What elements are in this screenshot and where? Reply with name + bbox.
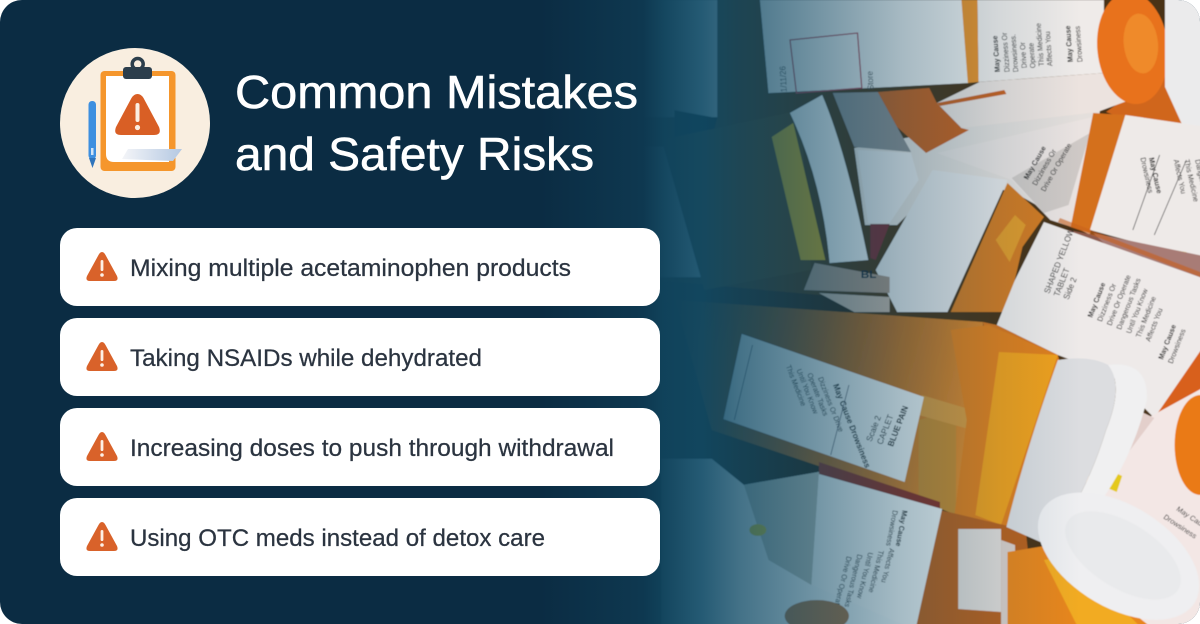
icon: clipboard with warning [60, 48, 210, 198]
photo: pile of prescription pill bottles: May Cause [1147, 157, 1164, 194]
row 3: increasing doses: Increasing doses to push through withdrawal [130, 435, 614, 462]
photo: pile of prescription pill bottles: May Cause [894, 510, 910, 547]
photo: pile of prescription pill bottles: Drowsiness [1138, 157, 1156, 194]
photo: pile of prescription pill bottles: Dizziness Or Drive [816, 376, 846, 433]
row 3: increasing doses [60, 408, 660, 486]
title: Common Mistakes [235, 66, 638, 118]
photo: pile of prescription pill bottles: May Cause [1085, 281, 1107, 319]
photo: pile of prescription pill bottles [619, 0, 1200, 624]
photo: pile of prescription pill bottles: Drowsiness [1073, 25, 1085, 62]
photo: pile of prescription pill bottles: Scale 2 [864, 414, 883, 443]
photo: pile of prescription pill bottles: This Medicine [867, 550, 886, 594]
photo: pile of prescription pill bottles: May Cause [1021, 145, 1048, 181]
photo: pile of prescription pill bottles: Drowsiness. [1008, 34, 1020, 72]
row 1: mixing products: Mixing multiple acetaminophen products [130, 255, 571, 282]
row 2: NSAIDs [60, 318, 660, 396]
photo: pile of prescription pill bottles: BL [861, 269, 876, 281]
photo: pile of prescription pill bottles: Dizziness Or [1030, 147, 1058, 187]
title: and Safety Risks [235, 128, 594, 180]
photo: pile of prescription pill bottles: Drowsiness [1166, 327, 1188, 365]
photo: pile of prescription pill bottles: Dizziness Or [999, 32, 1012, 72]
photo: pile of prescription pill bottles: 1/11/26 [777, 65, 789, 92]
photo: pile of prescription pill bottles: CAPLET [874, 413, 895, 446]
row 4: OTC meds [60, 498, 660, 576]
photo: pile of prescription pill bottles: This Medicine [1033, 23, 1046, 66]
photo: pile of prescription pill bottles: Until You Know [1124, 287, 1150, 335]
photo: pile of prescription pill bottles: May Cause [1063, 25, 1075, 62]
photo: pile of prescription pill bottles: Affects You [879, 548, 897, 584]
photo: pile of prescription pill bottles: Drowsiness [1162, 512, 1199, 541]
photo: pile of prescription pill bottles: Dangerous Tasks [1114, 277, 1143, 331]
photo: pile of prescription pill bottles: Dangerous Tasks [842, 554, 865, 608]
photo: pile of prescription pill bottles: May Cause [990, 35, 1002, 72]
photo: pile of prescription pill bottles: Drive Or [1018, 41, 1029, 68]
photo: pile of prescription pill bottles: Drive Or Operate [1105, 274, 1133, 327]
photo: pile of prescription pill bottles: Side 2 [1061, 276, 1079, 301]
photo: pile of prescription pill bottles: Until You Know [855, 552, 875, 600]
photo: pile of prescription pill bottles: Drive Or Operate [1039, 142, 1074, 193]
photo: pile of prescription pill bottles: Operate [1026, 43, 1037, 68]
photo: pile of prescription pill bottles: Operate Tasks [805, 372, 831, 417]
photo: pile of prescription pill bottles: TABLET [1051, 267, 1072, 298]
photo: pile of prescription pill bottles: Until You Know [794, 368, 821, 416]
photo: pile of prescription pill bottles: May Cause Drowsiness [831, 382, 873, 469]
photo: pile of prescription pill bottles: SHAPED YELLOW [1042, 227, 1076, 295]
photo: pile of prescription pill bottles: Drive Or Operate [832, 556, 854, 609]
photo: pile of prescription pill bottles: Drowsiness [884, 510, 900, 547]
row 1: mixing products [60, 228, 660, 306]
photo: pile of prescription pill bottles: This Medicine [1134, 295, 1158, 339]
photo: pile of prescription pill bottles: Dizziness Or [1095, 282, 1118, 323]
row 4: OTC meds: Using OTC meds instead of detox care [130, 525, 545, 552]
photo: pile of prescription pill bottles: Store [864, 70, 876, 90]
photo: pile of prescription pill bottles: Affects You [1143, 307, 1165, 343]
photo: pile of prescription pill bottles: BLUE PAIN [885, 404, 910, 448]
photo: pile of prescription pill bottles: This Medicine [784, 364, 808, 407]
row 2: NSAIDs: Taking NSAIDs while dehydrated [130, 345, 482, 372]
title [235, 66, 638, 180]
photo: pile of prescription pill bottles: Affects You [1172, 159, 1188, 195]
photo: pile of prescription pill bottles: Affects You [1043, 31, 1055, 66]
gradient overlay fading photo into the navy panel [604, 0, 1056, 624]
photo: pile of prescription pill bottles: May Cause [1156, 323, 1178, 361]
